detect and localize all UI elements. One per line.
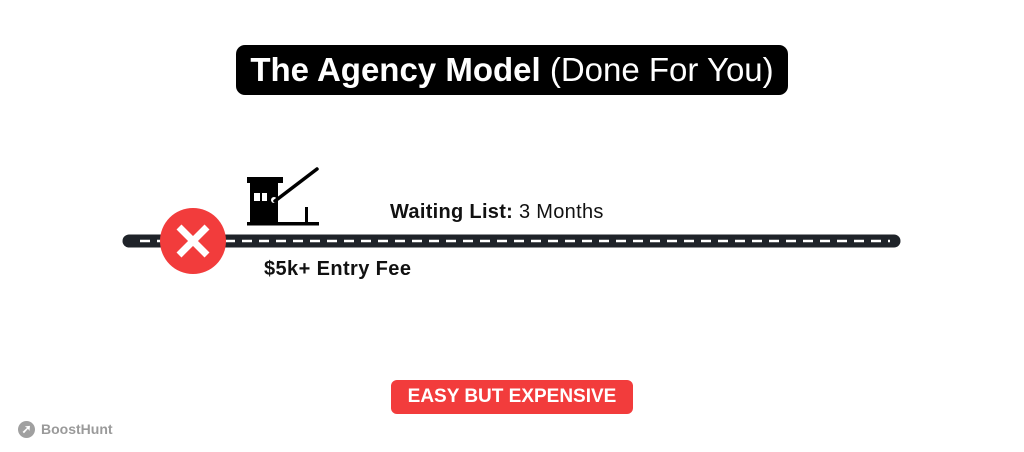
logo: BoostHunt <box>41 421 113 437</box>
text: entry fee: $5k+ Entry Fee <box>264 258 411 280</box>
badge: EASY BUT EXPENSIVE <box>408 386 616 407</box>
title: The Agency Model (Done For You) <box>250 51 774 88</box>
icon: toll booth <box>247 167 319 226</box>
icon: red x <box>160 208 226 274</box>
badge <box>391 380 633 414</box>
logo: ➚ <box>21 422 32 436</box>
text: waiting list: Waiting List: 3 Months <box>390 201 604 223</box>
